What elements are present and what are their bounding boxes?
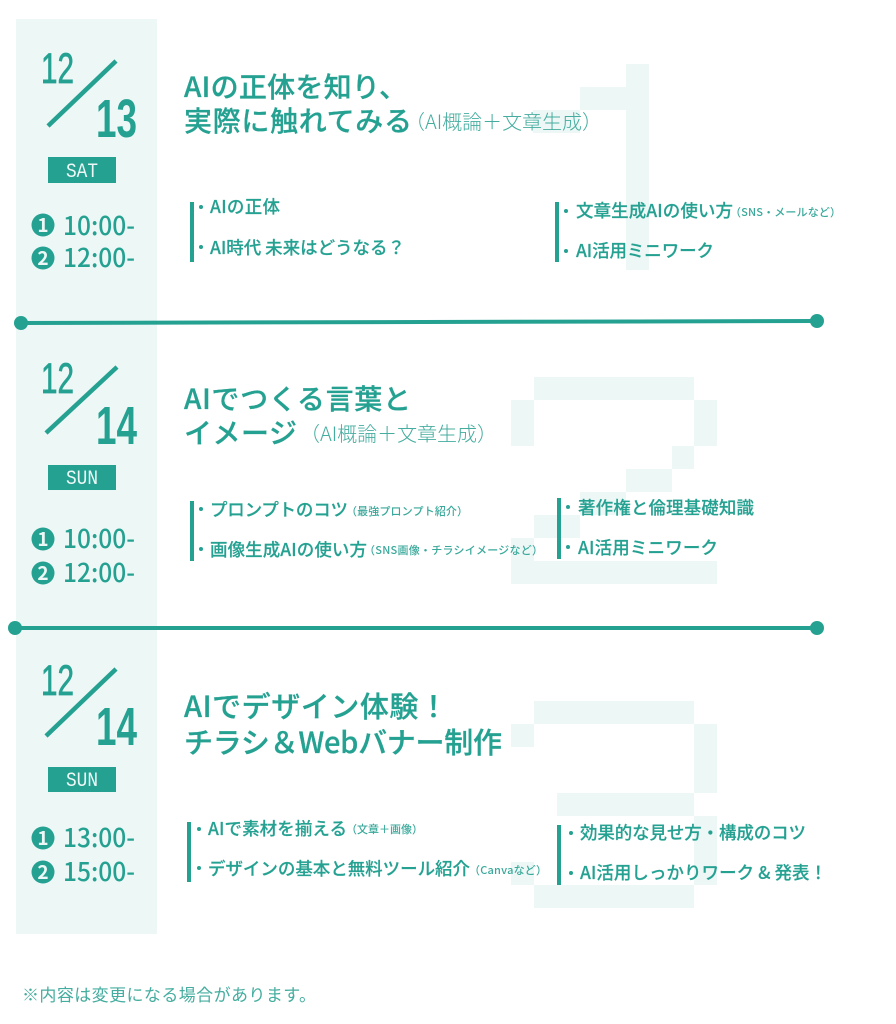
session 2 left topics: （最強プロンプト紹介）	[346, 503, 468, 519]
session 1 date block	[32, 45, 137, 275]
session 1 title: 実際に触れてみる	[184, 100, 412, 140]
date month 12: 12	[41, 657, 74, 705]
time slot 1	[32, 818, 135, 855]
date day 14: 14	[96, 697, 137, 757]
session 3 right topics: AI活用しっかりワーク & 発表！	[580, 860, 827, 885]
time slot 2	[32, 852, 135, 889]
weekday badge SUN: SUN	[66, 770, 98, 793]
date slash	[46, 367, 117, 433]
weekday badge SAT: SAT	[66, 161, 98, 184]
date month 12: 12	[41, 355, 74, 403]
big numeral 3 background	[511, 701, 717, 908]
session 3 left topics: （Canvaなど）	[469, 862, 547, 878]
time slot 2: 2	[37, 244, 49, 271]
weekday badge SUN: SUN	[66, 468, 98, 491]
session 2 title	[184, 378, 497, 452]
session 3 title	[184, 684, 502, 762]
session 1 title: （AI概論＋文章生成）	[405, 106, 602, 135]
divider 1 with end dots	[14, 314, 824, 330]
session 3 left topics: （文章＋画像）	[346, 821, 423, 837]
time slot 1	[32, 206, 135, 243]
session 3 left topics: AIで素材を揃える	[208, 816, 347, 841]
session 2 title: （AI概論＋文章生成）	[300, 418, 497, 447]
session 2 right topics: AI活用ミニワーク	[578, 535, 718, 560]
session 2 left topics: プロンプトのコツ	[210, 497, 348, 522]
session 2 right topics: 著作権と倫理基礎知識	[578, 495, 754, 520]
panel: date column background	[16, 19, 157, 934]
weekday badge SUN	[48, 465, 116, 491]
date slash	[48, 61, 116, 126]
time slot 2: 12:00-	[63, 238, 135, 275]
session 3 title: AIでデザイン体験！	[184, 684, 448, 726]
session 2 left topics	[190, 497, 543, 562]
session 3 left topics: デザインの基本と無料ツール紹介	[208, 856, 470, 881]
time slot 2: 2	[37, 858, 49, 885]
session 2 left topics: （SNS画像・チラシイメージなど）	[364, 542, 543, 558]
session 2 title: AIでつくる言葉と	[184, 378, 411, 418]
time slot 2	[32, 238, 135, 275]
date day 14: 14	[96, 396, 137, 456]
divider 2 with end dots	[8, 621, 824, 635]
session 2 date block	[32, 355, 137, 590]
time slot 2: 12:00-	[63, 553, 135, 590]
time slot 1: 10:00-	[63, 206, 135, 243]
session 1 title: AIの正体を知り、	[184, 66, 407, 106]
session 1 right topics: 文章生成AIの使い方	[576, 198, 733, 223]
date slash	[46, 669, 116, 736]
time slot 2: 2	[37, 559, 49, 586]
weekday badge SUN	[48, 767, 116, 793]
session 2 title: イメージ	[184, 412, 297, 452]
session 1 left topics	[190, 194, 405, 262]
session 1 title	[184, 66, 602, 140]
time slot 1: 13:00-	[63, 818, 135, 855]
time slot 1: 1	[37, 525, 49, 552]
session 1 left topics: AI時代 未来はどうなる？	[210, 235, 405, 260]
session 3 left topics	[187, 816, 547, 882]
session 2 right topics	[557, 495, 754, 560]
date day 13: 13	[96, 89, 137, 149]
session 1 right topics	[555, 198, 841, 263]
session 3 date block	[32, 657, 137, 889]
big numeral 2 background	[511, 377, 717, 584]
session 3 right topics: 効果的な見せ方・構成のコツ	[580, 820, 806, 845]
session 1 right topics: （SNS・メールなど）	[730, 204, 841, 220]
weekday badge SAT	[48, 157, 116, 184]
session 1 left topics: AIの正体	[210, 194, 280, 219]
time slot 1: 1	[37, 211, 49, 238]
footnote: ※内容は変更になる場合があります。	[22, 981, 316, 1006]
time slot 2	[32, 553, 135, 590]
time slot 1	[32, 519, 135, 556]
time slot 1: 1	[37, 824, 49, 851]
session 3 right topics	[557, 820, 827, 885]
session 3 title: チラシ＆Webバナー制作	[184, 720, 502, 762]
session 1 right topics: AI活用ミニワーク	[576, 238, 714, 263]
time slot 1: 10:00-	[63, 519, 135, 556]
time slot 2: 15:00-	[63, 852, 135, 889]
session 2 left topics: 画像生成AIの使い方	[210, 537, 367, 562]
date month 12: 12	[41, 45, 74, 93]
big numeral 1 background	[533, 64, 649, 270]
